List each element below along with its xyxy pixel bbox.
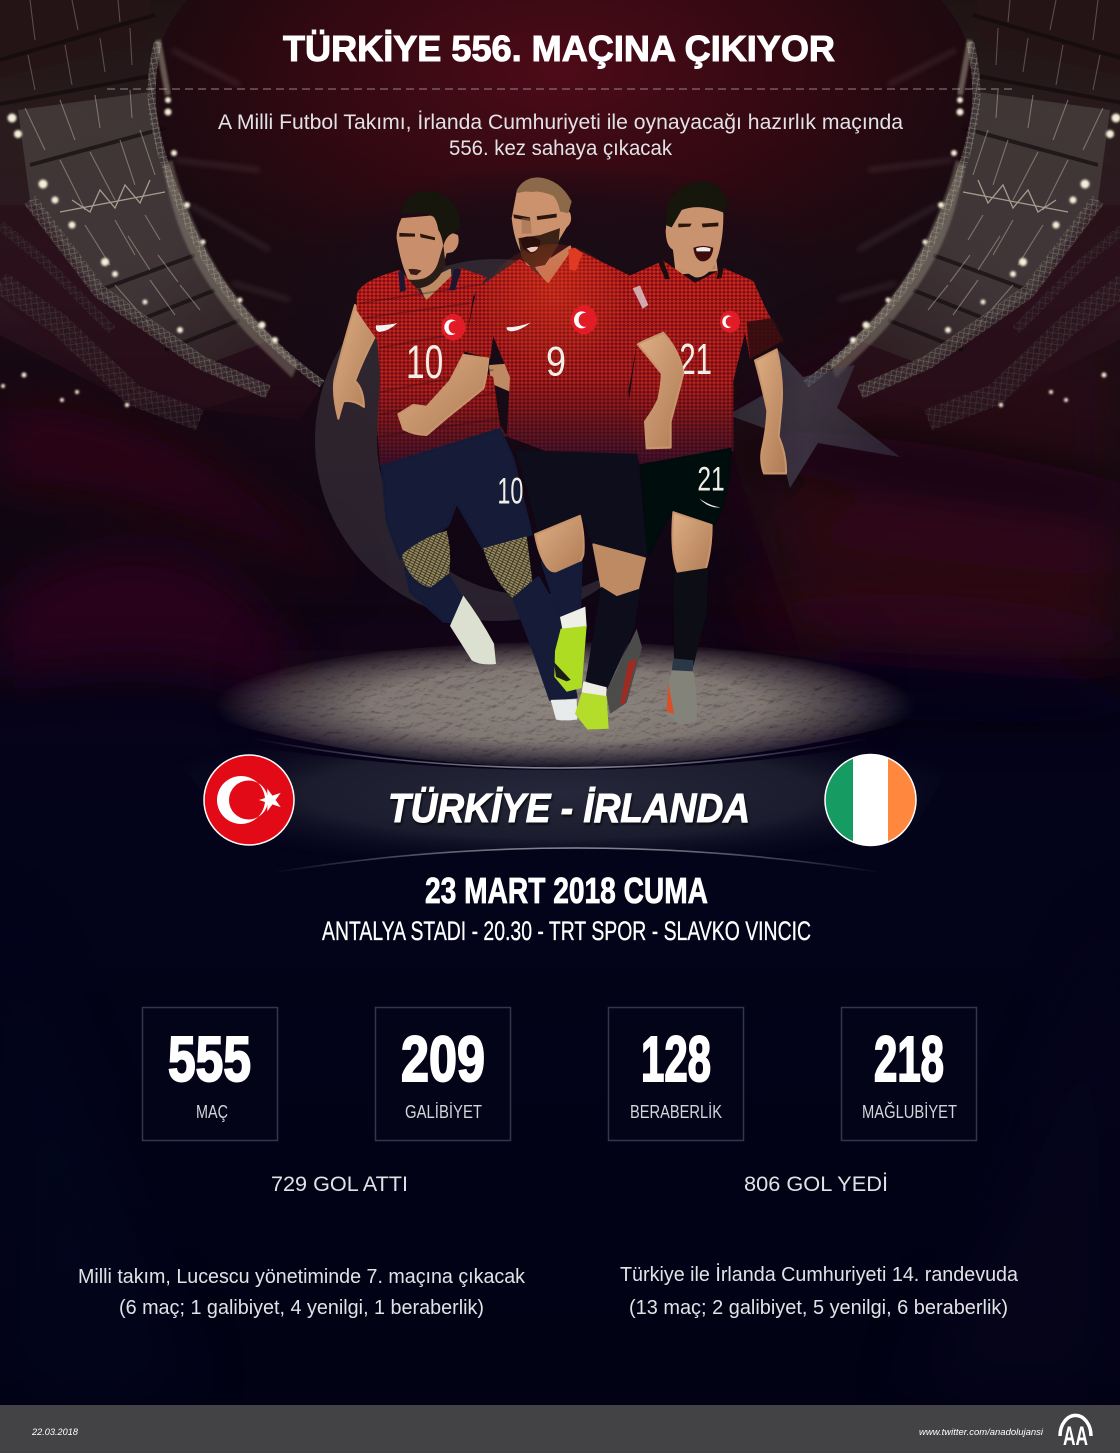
flag: Türkiye	[204, 755, 294, 845]
title: TÜRKİYE 556. MAÇINA ÇIKIYOR	[283, 28, 835, 69]
goals scored: 729 GOL ATTI	[271, 1173, 408, 1196]
dashed divider	[107, 88, 1015, 90]
player 21: 21	[697, 460, 725, 498]
match title: TÜRKİYE - İRLANDA	[388, 785, 750, 831]
note: head to head with Ireland: Türkiye ile İrlanda Cumhuriyeti 14. randevuda	[620, 1263, 1019, 1286]
stat: 218 mağlubiyet: MAĞLUBİYET	[862, 1101, 957, 1122]
subtitle: A Milli Futbol Takımı, İrlanda Cumhuriyeti ile oynayacağı hazırlık maçında	[218, 111, 903, 134]
note: head to head with Ireland	[620, 1263, 1019, 1319]
note: Lucescu record: (6 maç; 1 galibiyet, 4 yenilgi, 1 beraberlik)	[119, 1297, 484, 1319]
stat: 128 beraberlik: BERABERLİK	[630, 1102, 722, 1122]
footer date: 22.03.2018	[31, 1427, 78, 1437]
three footballers illustration	[334, 177, 786, 729]
stat: 209 galibiyet	[376, 1008, 510, 1140]
icon: Anadolu Ajansı logo	[1060, 1415, 1091, 1451]
note: head to head with Ireland: (13 maç; 2 galibiyet, 5 yenilgi, 6 beraberlik)	[629, 1297, 1008, 1319]
match banner	[150, 728, 970, 873]
subtitle	[218, 111, 903, 160]
match date: 23 MART 2018 CUMA	[425, 870, 708, 911]
player 10: 10	[406, 335, 443, 388]
icon: Anadolu Ajansı logo: AA	[1063, 1421, 1088, 1451]
stadium roof: right	[806, 0, 1120, 420]
player 9: 9	[546, 339, 566, 385]
player 10	[334, 191, 577, 720]
banner curved highlights	[250, 738, 884, 873]
stat: 555 maç	[142, 1008, 278, 1140]
stat: 128 beraberlik	[608, 1008, 744, 1140]
stat: 128 beraberlik: 128	[641, 1023, 711, 1095]
illuminated floor under the players	[224, 642, 907, 767]
flag: İrlanda	[825, 754, 917, 846]
player 10: 10	[497, 471, 523, 512]
footer bar	[0, 1405, 1120, 1453]
player 21	[628, 181, 786, 725]
note: Lucescu record: Milli takım, Lucescu yönetiminde 7. maçına çıkacak	[78, 1266, 526, 1288]
stat: 209 galibiyet: GALİBİYET	[405, 1102, 482, 1122]
player 9	[398, 177, 683, 729]
player 21: 21	[679, 334, 712, 384]
turkish crescent and star emblem behind the players	[315, 259, 900, 621]
note: Lucescu record	[78, 1266, 526, 1319]
goals conceded: 806 GOL YEDİ	[744, 1173, 888, 1196]
stat: 218 mağlubiyet	[842, 1008, 976, 1140]
subtitle: 556. kez sahaya çıkacak	[449, 137, 672, 160]
stat: 555 maç: 555	[168, 1023, 251, 1095]
footer twitter address: www.twitter.com/anadolujansi	[919, 1427, 1044, 1438]
stat: 209 galibiyet: 209	[401, 1023, 485, 1095]
stat: 218 mağlubiyet: 218	[874, 1023, 944, 1095]
stadium roof: left	[0, 0, 322, 420]
stat: 555 maç: MAÇ	[196, 1102, 228, 1122]
match details: ANTALYA STADI - 20.30 - TRT SPOR - SLAVKO VINCIC	[322, 916, 811, 946]
